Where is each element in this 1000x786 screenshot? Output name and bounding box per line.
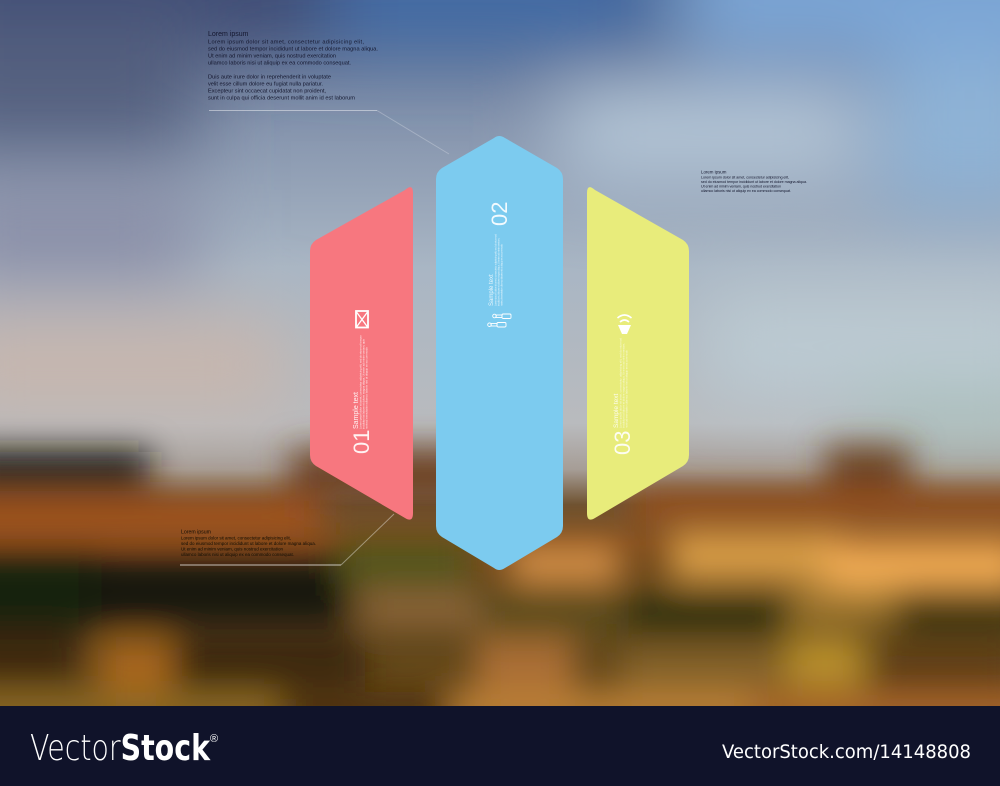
sample text 03: Lorem ipsum dolor sit amet, consectetur adipisicing elit, sed do eiusmod (618, 338, 622, 428)
callout text: bottom left: ullamco laboris nisi ut aliquip ex ea commodo consequat. (181, 552, 294, 557)
icon: wireless speaker (618, 315, 632, 334)
sample text 03: nostrud exercitation ullamco laboris nisi ut aliquip ex ea commodo (624, 350, 628, 428)
callout 3 connector line (180, 514, 394, 565)
callout text: right: Lorem ipsum (701, 170, 727, 174)
callout text: right: ullamco laboris nisi ut aliquip ex ea commodo consequat. (701, 189, 791, 193)
callout text: top left: Lorem ipsum (208, 31, 249, 38)
callout text: top left: sed do eiusmod tempor incididunt ut labore et dolore magna aliqua. (208, 46, 378, 52)
callout text: top left: Ut enim ad minim veniam, quis nostrud exercitation (208, 54, 336, 60)
number 02: 02 (487, 202, 512, 226)
sample text 01: Sample text (353, 392, 360, 429)
sample text 02: nostrud exercitation ullamco laboris nisi ut aliquip ex ea commodo (500, 244, 504, 306)
callout text: bottom left: Ut enim ad minim veniam, quis nostrud exercitation (181, 546, 283, 552)
registered mark: ® (210, 733, 218, 745)
callout text: right (701, 170, 807, 193)
sample text 03: incididunt ut labore et dolore magna aliqua. Ut enim ad minim veniam, (622, 343, 626, 428)
callout text: bottom left (181, 530, 316, 557)
sample text 02: Lorem ipsum dolor sit amet, consectetur adipisicing elit, sed do eiusmod (494, 234, 498, 306)
callout text: right: sed do eiusmod tempor incididunt ut labore et dolore magna aliqua. (701, 180, 807, 184)
callout text: right: Lorem ipsum dolor sit amet, consectetur adipisicing elit, (701, 176, 789, 180)
callout text: right: Ut enim ad minim veniam, quis nostrud exercitation (701, 184, 781, 188)
callout text: top left: Duis aute irure dolor in reprehenderit in voluptate (208, 74, 331, 80)
sample text 03: Sample text (613, 393, 620, 428)
sample text 01: incididunt ut labore et dolore magna aliqua. Ut enim ad minim veniam, quis (362, 338, 366, 429)
sample text 01 (353, 335, 368, 429)
icon: connectors (488, 314, 511, 327)
callout text: top left: sunt in culpa qui officia deserunt mollit anim id est laborum (208, 96, 355, 102)
callout text: top left: velit esse cillum dolore eu fugiat nulla pariatur. (208, 82, 323, 88)
footer bar (0, 706, 1000, 786)
number 03: 03 (610, 431, 635, 455)
sample text 02: incididunt ut labore et dolore magna aliqua. Ut enim ad minim veniam, (496, 238, 500, 306)
callout text: top left: Excepteur sint occaecat cupidatat non proident, (208, 88, 326, 94)
callout text: bottom left: Lorem ipsum dolor sit amet, consectetur adipisicing elit, (181, 536, 291, 540)
callout text: top left (208, 31, 378, 102)
callout 1 connector line (209, 110, 449, 154)
sample text 02 (489, 234, 504, 306)
sample text 02: Sample text (489, 274, 495, 306)
sample text 01: nostrud exercitation ullamco laboris nisi ut aliquip ex ea commodo (364, 347, 368, 429)
panel: blue segment 02 (436, 136, 563, 570)
number 01: 01 (349, 430, 374, 454)
panel: red segment 01 (310, 187, 413, 520)
logo: VectorStock (30, 728, 211, 769)
stock url: VectorStock.com/14148808 (722, 741, 971, 763)
callout text: top left: Lorem ipsum dolor sit amet, consectetur adipisicing elit, (208, 40, 364, 46)
panel: yellow segment 03 (587, 187, 689, 520)
sample text 03 (613, 338, 628, 428)
callout text: top left: ullamco laboris nisi ut aliquip ex ea commodo consequat. (208, 60, 351, 66)
callout text: bottom left: sed do eiusmod tempor incididunt ut labore et dolore magna aliqua. (181, 541, 316, 546)
callout text: bottom left: Lorem ipsum (181, 530, 211, 536)
sample text 01: Lorem ipsum dolor sit amet, consectetur adipisicing elit, sed do eiusmod tempor (358, 335, 362, 429)
icon: envelope (356, 311, 368, 328)
